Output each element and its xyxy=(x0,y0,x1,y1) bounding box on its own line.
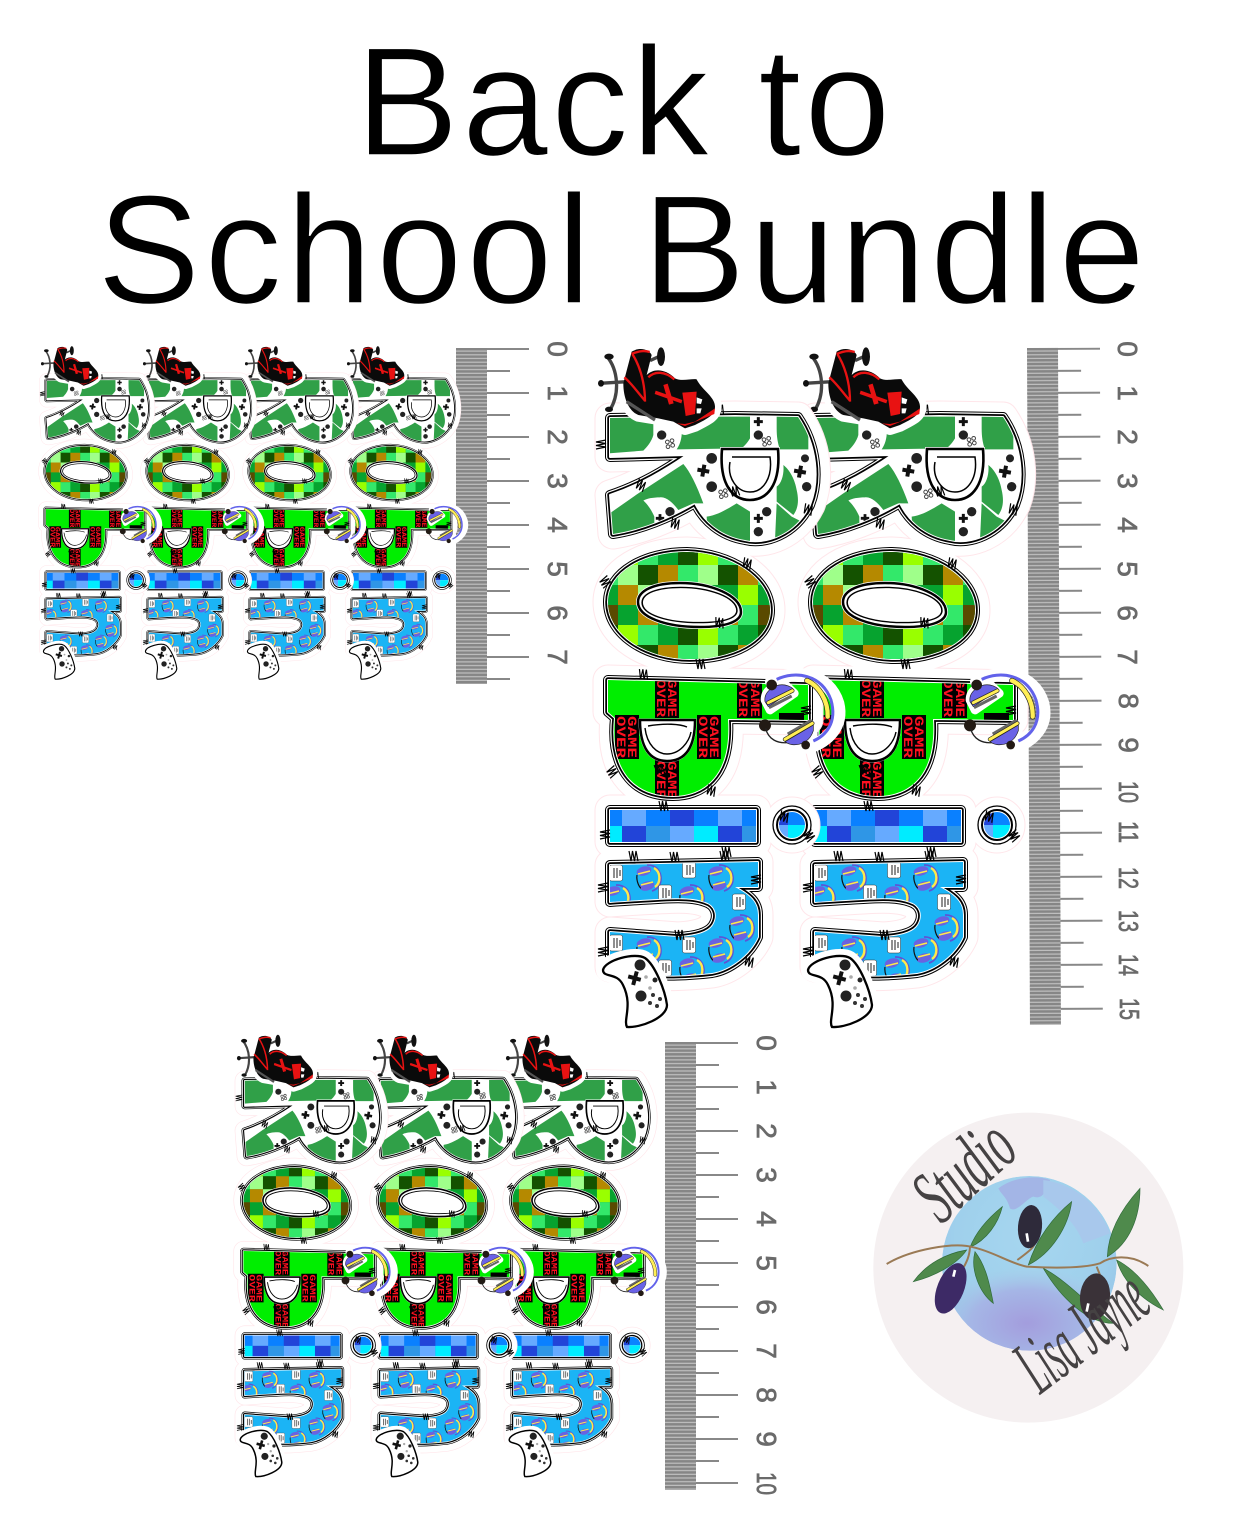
ruler: 7 inch scale: 3 xyxy=(542,473,573,489)
ruler: 10 inch scale: 2 xyxy=(751,1123,782,1139)
olive leaves xyxy=(913,1188,1163,1323)
ruler: 10 inch scale: 6 xyxy=(751,1299,782,1315)
ruler: 15 inch scale: 7 xyxy=(1112,649,1143,665)
watercolor circle xyxy=(942,1176,1117,1351)
logo: Studio Lisa Jayne: Lisa Jayne xyxy=(997,1253,1165,1409)
ruler: 15 inch scale: 4 xyxy=(1112,517,1143,533)
logo: Studio Lisa Jayne xyxy=(873,1101,1183,1423)
ruler: 15 inch scale: 0 xyxy=(1112,341,1143,357)
ruler: 15 inch scale: 10 xyxy=(1113,781,1144,803)
ruler: 7 inch scale: 1 xyxy=(542,385,573,401)
ruler: 15 inch scale: 11 xyxy=(1113,821,1144,843)
ruler: 10 inch scale: 3 xyxy=(751,1167,782,1183)
title xyxy=(97,15,1145,336)
ruler: 7 inch scale: 4 xyxy=(542,517,573,533)
ruler: 7 inch scale xyxy=(456,341,573,684)
ruler: 15 inch scale: 2 xyxy=(1112,429,1143,445)
ruler: 15 inch scale: 5 xyxy=(1112,561,1143,577)
title: School Bundle xyxy=(97,163,1145,336)
ruler: 15 inch scale: 6 xyxy=(1112,605,1143,621)
ruler: 10 inch scale: 4 xyxy=(751,1211,782,1227)
ruler: 15 inch scale: 1 xyxy=(1112,385,1143,401)
ruler: 7 inch scale: 2 xyxy=(542,429,573,445)
ruler: 15 inch scale: 15 xyxy=(1114,998,1145,1020)
ruler: 15 inch scale: 12 xyxy=(1113,867,1144,889)
ruler: 7 inch scale: 6 xyxy=(542,605,573,621)
ruler: 15 inch scale xyxy=(1027,341,1145,1025)
olive branch xyxy=(887,1243,1148,1275)
ruler: 10 inch scale: 7 xyxy=(751,1343,782,1359)
ruler: 7 inch scale: 5 xyxy=(542,561,573,577)
signature text: Studio xyxy=(895,1101,1032,1238)
ruler: 10 inch scale xyxy=(665,1035,782,1495)
sticker set: small size row of four xyxy=(40,346,465,679)
olives xyxy=(1016,1204,1044,1249)
ruler: 15 inch scale: 8 xyxy=(1113,693,1144,709)
ruler: 10 inch scale: 0 xyxy=(751,1035,782,1051)
ruler: 15 inch scale: 3 xyxy=(1112,473,1143,489)
sticker set: large size pair xyxy=(595,347,1044,1027)
ruler: 10 inch scale: 5 xyxy=(751,1255,782,1271)
ruler: 15 inch scale: 14 xyxy=(1113,954,1144,976)
ruler: 10 inch scale: 1 xyxy=(751,1079,782,1095)
sticker set: medium size row of three xyxy=(235,1035,662,1477)
ruler: 7 inch scale: 7 xyxy=(542,649,573,665)
ruler: 10 inch scale: 10 xyxy=(751,1472,782,1495)
ruler: 10 inch scale: 9 xyxy=(751,1431,782,1447)
ruler: 10 inch scale: 8 xyxy=(751,1387,782,1403)
ruler: 15 inch scale: 13 xyxy=(1113,910,1144,932)
ruler: 15 inch scale: 9 xyxy=(1113,737,1144,753)
title: Back to xyxy=(356,15,890,188)
ruler: 7 inch scale: 0 xyxy=(542,341,573,357)
